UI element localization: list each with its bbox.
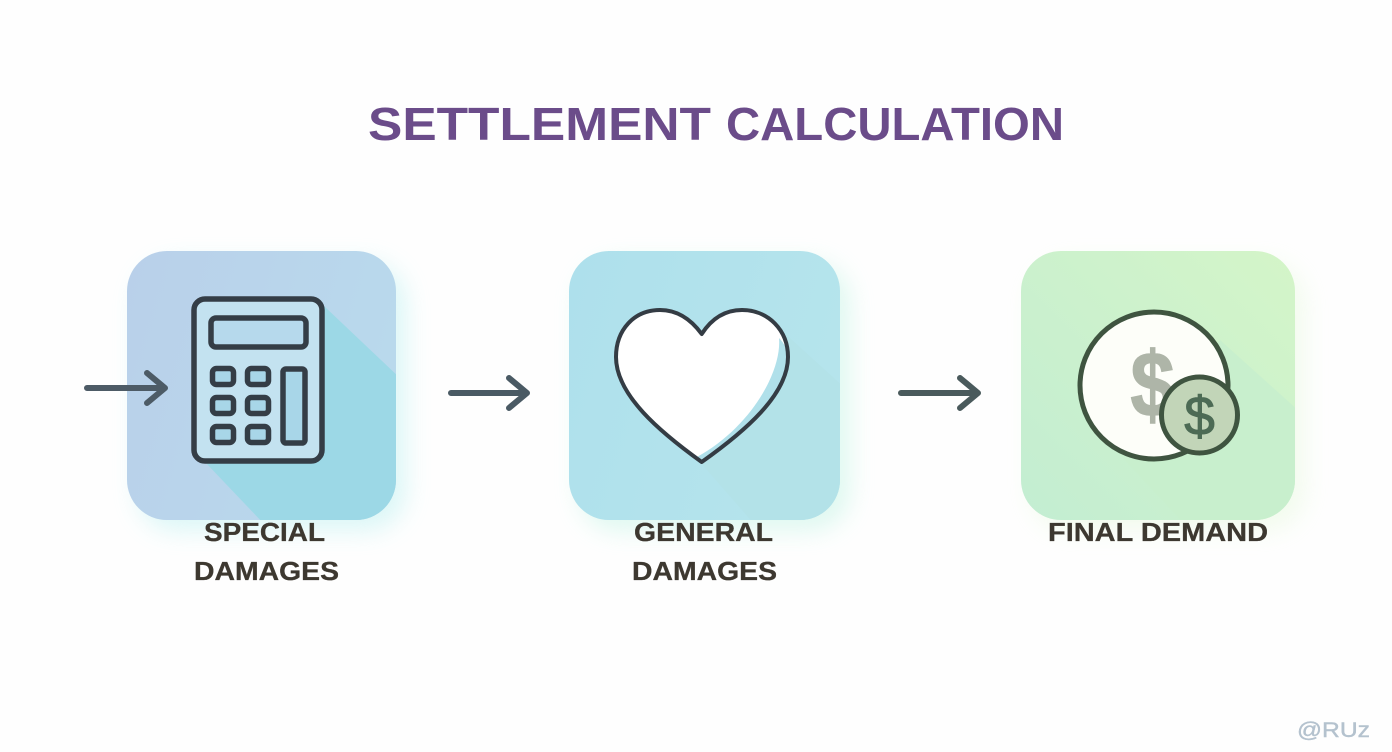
title bbox=[368, 98, 1064, 150]
arrow: into special damages bbox=[87, 373, 165, 403]
label: general damages bbox=[632, 517, 777, 586]
icon: heart bbox=[616, 310, 788, 462]
label: special damages: SPECIAL bbox=[204, 517, 325, 547]
label: final demand: FINAL DEMAND bbox=[1048, 517, 1268, 547]
label: special damages: DAMAGES bbox=[194, 556, 339, 586]
panel: final demand bbox=[1021, 251, 1305, 547]
icon: dollar coins: $ bbox=[1184, 385, 1215, 447]
label: general damages: GENERAL bbox=[634, 517, 773, 547]
title: SETTLEMENT bbox=[368, 98, 711, 150]
infographic canvas bbox=[84, 108, 1369, 740]
panel: special damages bbox=[127, 251, 406, 586]
panel: general damages bbox=[569, 251, 850, 586]
icon: dollar coins bbox=[1080, 312, 1238, 459]
arrow: general to final bbox=[901, 378, 978, 408]
icon: dollar coins: $ bbox=[1130, 333, 1175, 436]
icon: calculator bbox=[194, 299, 322, 461]
title: CALCULATION bbox=[726, 98, 1064, 150]
label: special damages bbox=[194, 517, 339, 586]
watermark: @RUz bbox=[1297, 719, 1370, 742]
label: general damages: DAMAGES bbox=[632, 556, 777, 586]
arrow: special to general bbox=[451, 378, 527, 408]
